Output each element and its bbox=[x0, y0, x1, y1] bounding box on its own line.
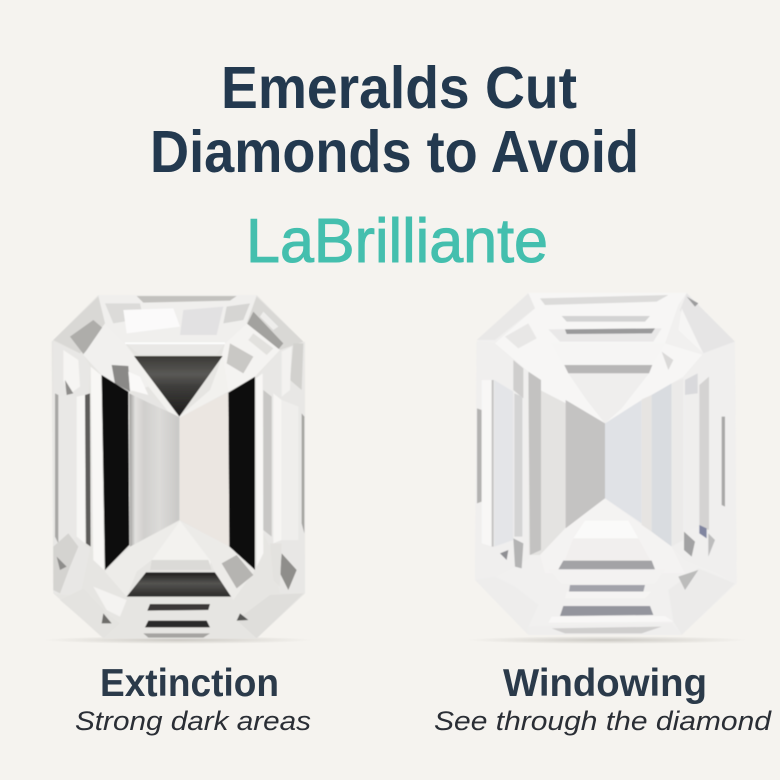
title bbox=[150, 55, 639, 185]
right side columns bbox=[256, 342, 305, 593]
crown bottom bbox=[475, 568, 735, 635]
left side columns bbox=[475, 342, 529, 580]
left side columns bbox=[53, 342, 104, 597]
title: Emeralds Cut bbox=[221, 55, 577, 121]
table reflection bbox=[564, 365, 652, 423]
diamond: windowing bbox=[475, 293, 737, 635]
bottom center facets bbox=[540, 498, 685, 623]
central pavilion light panels bbox=[129, 356, 229, 547]
crown top bbox=[53, 295, 303, 354]
dark extinction areas bbox=[102, 356, 255, 627]
outline bbox=[52, 295, 305, 638]
corner facets top bbox=[495, 308, 703, 423]
crown top bbox=[477, 293, 735, 365]
label: windowing: See through the diamond bbox=[434, 706, 772, 736]
crown bottom bbox=[60, 587, 303, 638]
outline bbox=[475, 293, 737, 635]
label: windowing bbox=[434, 662, 772, 736]
ground shadows bbox=[43, 636, 747, 644]
diamond: extinction bbox=[52, 295, 305, 638]
bottom center facets bbox=[105, 521, 255, 600]
right side columns bbox=[672, 342, 737, 583]
central window panels bbox=[528, 372, 672, 555]
corner facets top bbox=[83, 323, 280, 395]
label: windowing: Windowing bbox=[503, 662, 707, 705]
brand name: LaBrilliante bbox=[246, 207, 548, 276]
label: extinction: Strong dark areas bbox=[75, 706, 311, 736]
label: extinction bbox=[75, 662, 311, 736]
title: Diamonds to Avoid bbox=[150, 119, 639, 185]
label: extinction: Extinction bbox=[100, 662, 279, 705]
